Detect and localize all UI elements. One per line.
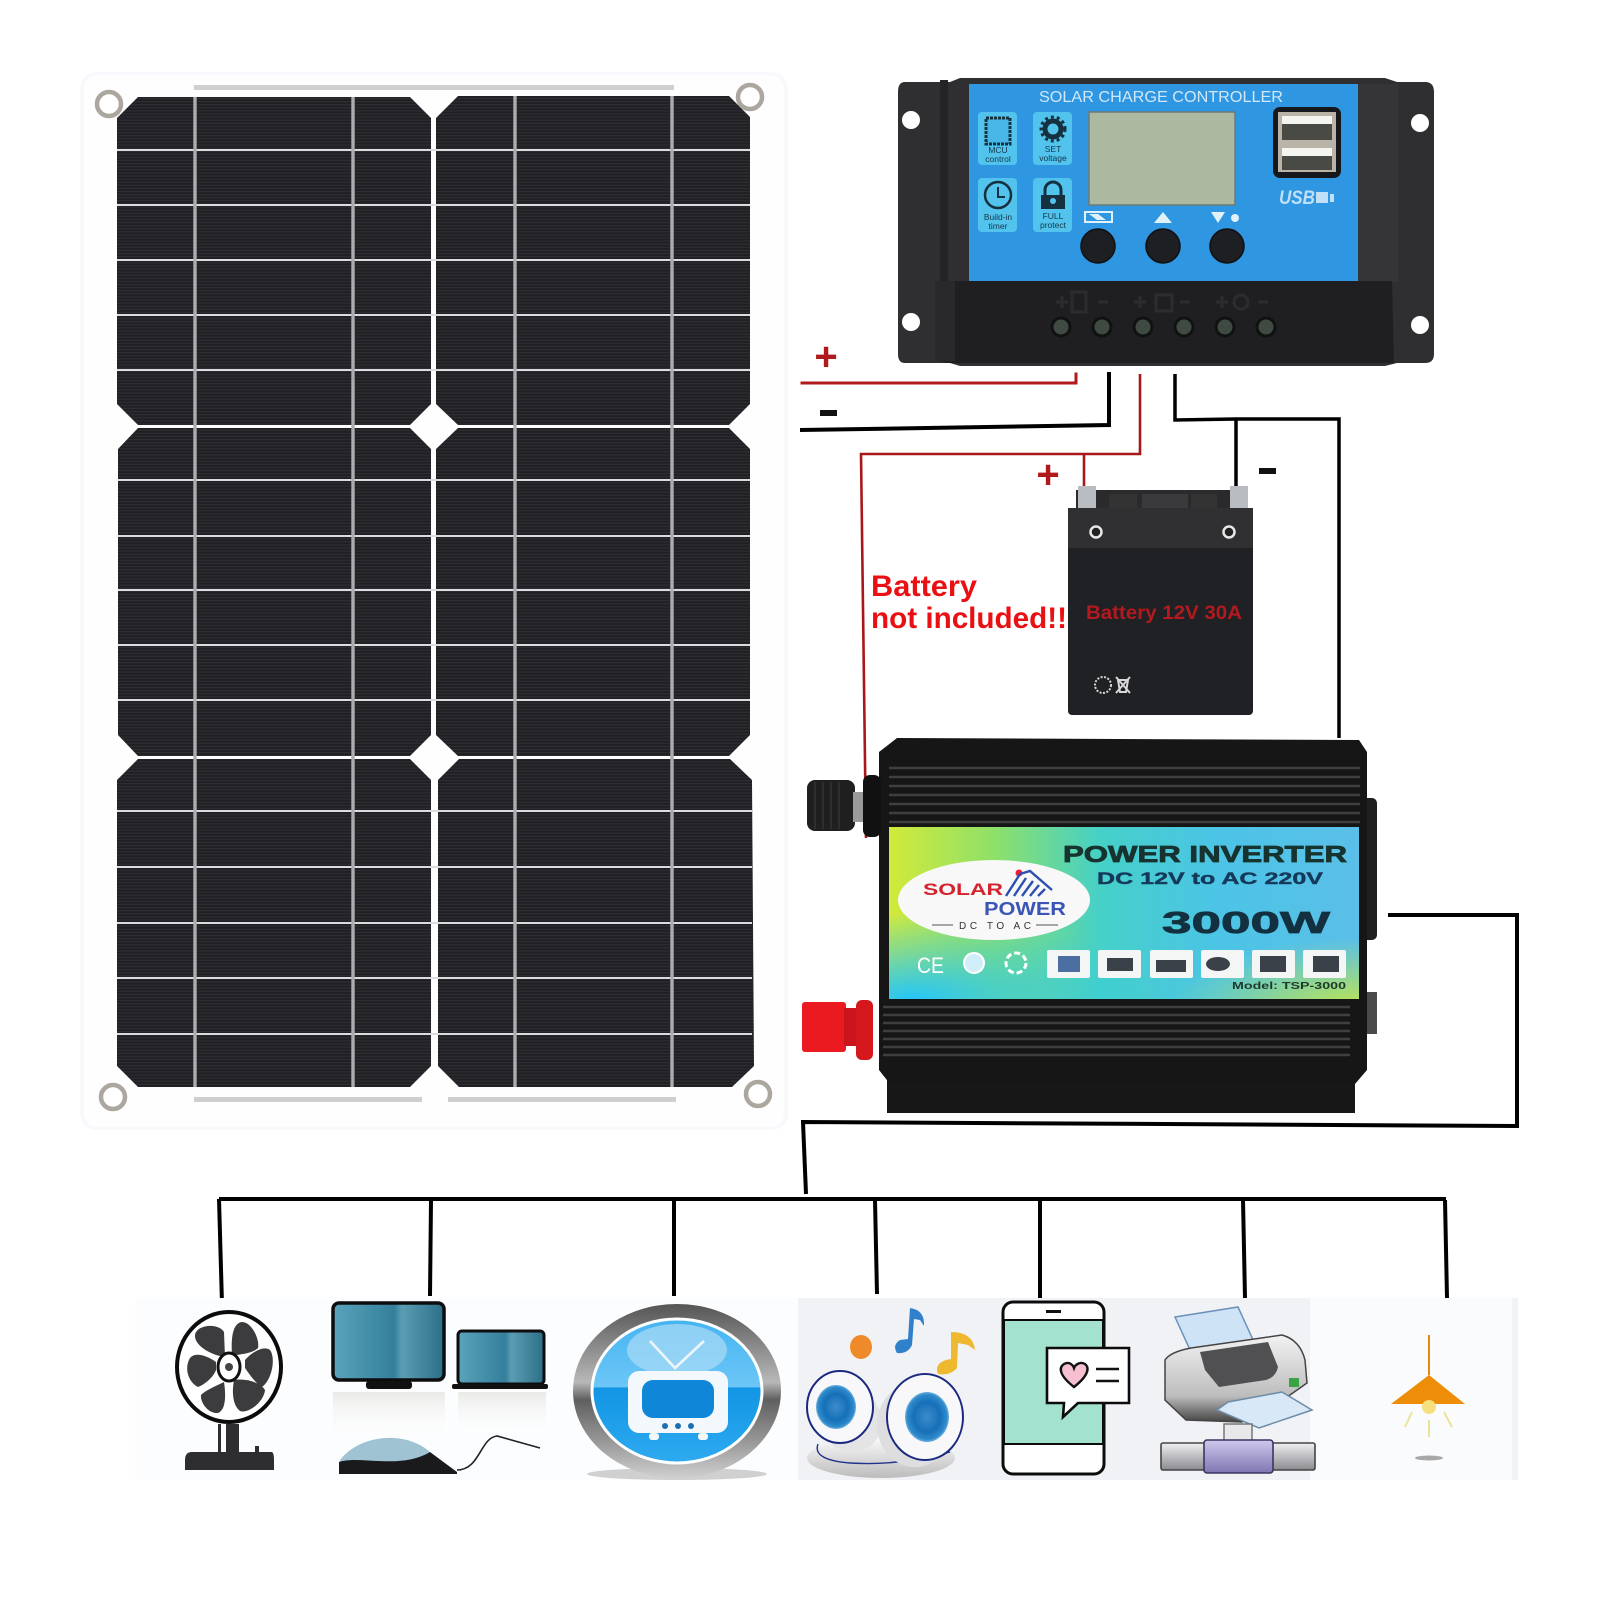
note: battery not included	[871, 570, 1067, 635]
wire: inverter AC output to load bus	[803, 915, 1517, 1194]
icon: television globe	[573, 1304, 781, 1480]
badge: build-in timer	[978, 178, 1017, 232]
model number: Model: TSP-3000	[1232, 980, 1346, 992]
embossed terminal symbols	[1056, 292, 1268, 312]
certification marks: CE	[917, 953, 944, 978]
minus sign: panel	[820, 410, 837, 416]
badge: full protect: protect	[1040, 220, 1067, 230]
LCD screen	[1089, 112, 1235, 205]
cell grid lines	[117, 150, 752, 1034]
inverter label	[889, 827, 1359, 999]
battery screws	[1090, 526, 1234, 538]
chat bubble	[1047, 1348, 1129, 1417]
fan blades	[187, 1322, 273, 1413]
load bus and drops	[219, 1199, 1447, 1304]
certification marks	[917, 953, 1026, 978]
tv set	[628, 1371, 728, 1433]
badge: full protect	[1033, 178, 1072, 232]
inverter body	[879, 738, 1367, 1084]
battery	[1068, 486, 1253, 715]
appliance strip background	[135, 1298, 1518, 1480]
mouse	[339, 1436, 540, 1474]
status icons	[1085, 212, 1239, 223]
badge: full protect: FULL	[1043, 211, 1064, 221]
badge: MCU control: control	[985, 154, 1011, 164]
USB ports	[1273, 107, 1341, 178]
cooling fins top	[889, 768, 1360, 822]
faceplate title: SOLAR CHARGE CONTROLLER	[1039, 89, 1283, 106]
badge: SET voltage: voltage	[1039, 153, 1067, 163]
positive terminal knob	[802, 1000, 873, 1060]
negative terminal knob	[807, 775, 881, 837]
antenna	[650, 1341, 704, 1368]
badge: build-in timer: Build-in	[984, 212, 1012, 222]
cooling fins bottom	[883, 1007, 1350, 1055]
icon: pendant lamp	[1391, 1335, 1465, 1460]
network connector	[1161, 1424, 1315, 1473]
battery terminals	[1076, 486, 1248, 510]
wires: controller to battery and inverter positive	[861, 374, 1140, 838]
side tabs	[1355, 798, 1377, 1034]
label wattage: 3000W	[1162, 905, 1331, 940]
terminal block	[935, 281, 1394, 363]
USB label: USB	[1279, 188, 1315, 209]
minus sign: battery	[1259, 468, 1276, 474]
battery rating: Battery 12V 30A	[1086, 603, 1242, 624]
icon: fan	[177, 1312, 281, 1470]
solar power logo	[898, 860, 1090, 940]
badge: SET voltage: SET	[1045, 144, 1061, 154]
label voltage: DC 12V to AC 220V	[1097, 869, 1324, 888]
solar panel	[80, 72, 788, 1130]
wires: panel to controller	[802, 374, 1109, 430]
badge: MCU control: MCU	[988, 145, 1008, 155]
badge: SET voltage	[1033, 112, 1072, 165]
label heading: POWER INVERTER	[1063, 841, 1348, 867]
mounting holes	[902, 111, 1429, 334]
solar cells	[117, 96, 754, 1087]
fan stand	[185, 1424, 274, 1470]
monitor	[333, 1303, 444, 1389]
reflections	[333, 1392, 546, 1442]
vertical busbars	[195, 96, 672, 1087]
icon: computer and laptop with mouse	[333, 1303, 548, 1474]
inverter feet	[887, 1075, 1355, 1113]
plus sign: panel: +	[814, 335, 838, 379]
plus sign: battery: +	[1036, 453, 1060, 497]
charge controller	[898, 78, 1434, 366]
blue faceplate	[969, 84, 1358, 282]
badge: MCU control	[978, 112, 1017, 165]
appliance thumbnails	[1047, 950, 1346, 978]
recycling marks	[1095, 677, 1130, 693]
note: battery not included: not included!!	[871, 602, 1067, 635]
badge: build-in timer: timer	[989, 221, 1008, 231]
power inverter	[802, 738, 1377, 1113]
icon: smartphone with chat bubble	[1003, 1302, 1129, 1474]
solar power logo: POWER	[984, 899, 1066, 919]
laptop	[452, 1331, 548, 1389]
wires: controller to battery and inverter negative	[1175, 374, 1339, 738]
solar power logo: SOLAR	[923, 880, 1003, 899]
music notes	[850, 1308, 975, 1374]
terminal screws	[1052, 318, 1275, 336]
control buttons	[1081, 229, 1244, 263]
top and bottom bus strips	[194, 85, 676, 1102]
note: battery not included: Battery	[871, 570, 977, 603]
icon: speakers and music notes	[807, 1308, 975, 1478]
grommets	[97, 85, 770, 1109]
solar power logo: DC TO AC	[959, 921, 1031, 932]
icon: network printer	[1161, 1307, 1315, 1473]
